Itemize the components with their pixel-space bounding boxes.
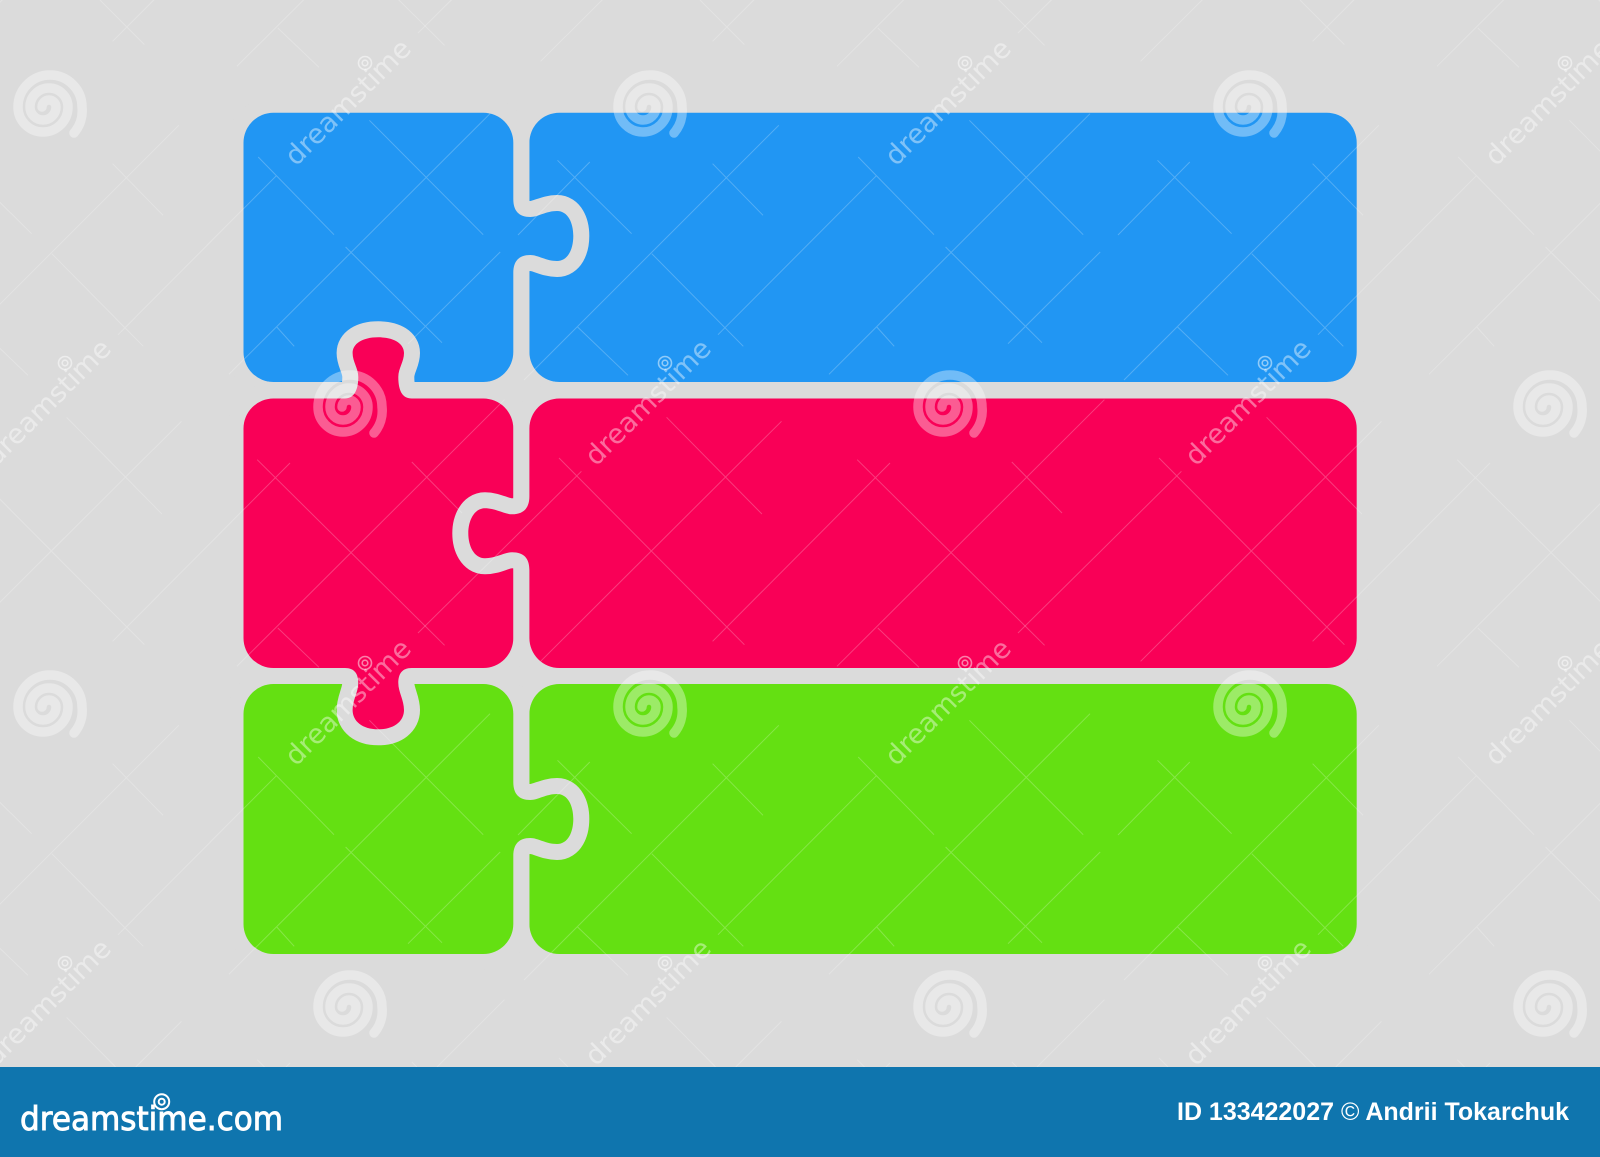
puzzle: blue row left piece with tab <box>244 113 573 382</box>
puzzle: red row left piece with top and bottom tabs <box>244 337 513 729</box>
watermark text: dreamstime <box>579 333 718 472</box>
watermark text: dreamstime <box>1179 333 1318 472</box>
puzzle: blue row right panel <box>529 113 1357 382</box>
footer bar <box>0 1067 1600 1157</box>
watermark text: dreamstime <box>279 633 418 772</box>
puzzle: green row left piece with tab <box>244 684 573 954</box>
footer image credit: ID 133422027 © Andrii Tokarchuk <box>1177 1098 1569 1126</box>
puzzle: green row right panel <box>529 684 1357 954</box>
footer logo text: dreamstime.com <box>20 1099 283 1138</box>
watermark text: dreamstime <box>879 633 1018 772</box>
watermark text: dreamstime <box>579 933 718 1072</box>
puzzle: red row right panel with tab <box>468 398 1357 668</box>
watermark text: dreamstime <box>879 33 1018 172</box>
watermark text: dreamstime <box>1179 933 1318 1072</box>
icon: logo spiral <box>154 1094 169 1109</box>
watermark text: dreamstime <box>279 33 418 172</box>
